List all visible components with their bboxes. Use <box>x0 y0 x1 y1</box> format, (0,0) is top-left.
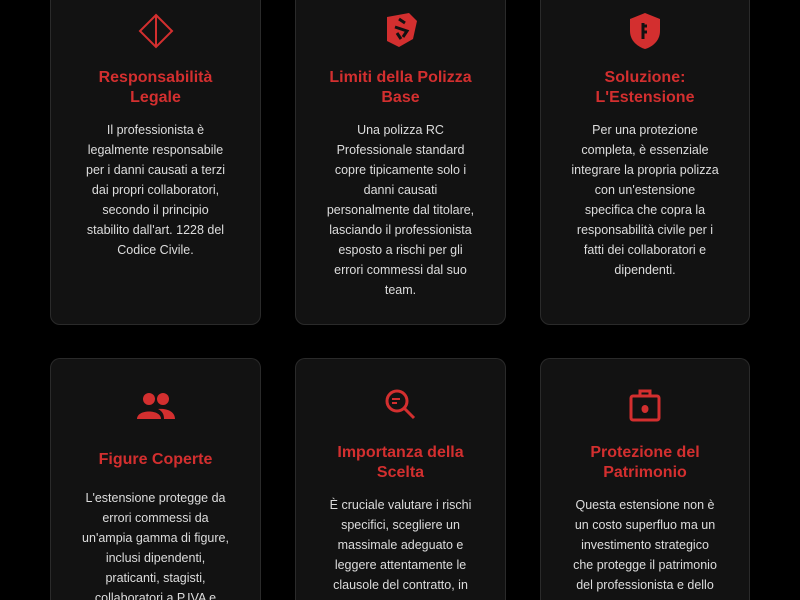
body: errori commessi dal suo <box>334 263 467 277</box>
body <box>327 123 474 297</box>
title <box>99 69 212 106</box>
icon: people <box>137 393 175 419</box>
body: del professionista e dello <box>576 578 714 592</box>
body: danni causati <box>364 183 437 197</box>
body: stabilito dall'art. 1228 del <box>87 223 224 237</box>
title: Figure Coperte <box>99 451 212 468</box>
body: esposto a rischi per gli <box>338 243 463 257</box>
title: Patrimonio <box>603 464 687 481</box>
body: legalmente responsabile <box>88 143 223 157</box>
body: investimento strategico <box>581 538 709 552</box>
body: Per una protezione <box>592 123 698 137</box>
icon: briefcase lock <box>630 390 660 422</box>
title: Soluzione: <box>605 69 685 86</box>
title <box>337 444 464 481</box>
body: specifici, scegliere un <box>341 518 460 532</box>
body: lasciando il professionista <box>329 223 472 237</box>
body: clausole del contratto, in <box>333 578 468 592</box>
body: specifica che copra la <box>585 203 705 217</box>
card: Importanza della Scelta <box>295 358 506 600</box>
title <box>596 69 694 106</box>
body: praticanti, stagisti, <box>105 571 206 585</box>
body <box>330 498 471 592</box>
body: integrare la propria polizza <box>571 163 719 177</box>
card: Protezione del Patrimonio <box>540 358 750 600</box>
body: Il professionista è <box>107 123 204 137</box>
body: dai propri collaboratori, <box>92 183 219 197</box>
title: Base <box>381 89 420 106</box>
body <box>82 491 229 600</box>
title: Scelta <box>377 464 424 481</box>
icon: diamond <box>138 14 174 48</box>
body: È cruciale valutare i rischi <box>330 498 471 512</box>
body: secondo il principio <box>102 203 209 217</box>
body: massimale adeguato e <box>338 538 463 552</box>
body: copre tipicamente solo i <box>335 163 466 177</box>
title: Protezione del <box>590 444 700 461</box>
title: Limiti della Polizza <box>329 69 472 86</box>
body <box>86 123 225 257</box>
body: responsabilità civile per i <box>577 223 713 237</box>
icon: magnifier <box>386 390 415 419</box>
body: con un'estensione <box>595 183 695 197</box>
card: Figure Coperte <box>50 358 261 600</box>
title: Importanza della <box>337 444 464 461</box>
body: un costo superfluo ma un <box>575 518 715 532</box>
title: Legale <box>130 89 181 106</box>
body: fatti dei collaboratori e <box>584 243 706 257</box>
body: leggere attentamente le <box>335 558 466 572</box>
icon: shield key <box>630 13 660 49</box>
title <box>590 444 700 481</box>
card: Responsabilità Legale <box>50 0 261 325</box>
body: Una polizza RC <box>357 123 444 137</box>
body: completa, è essenziale <box>581 143 709 157</box>
body: un'ampia gamma di figure, <box>82 531 229 545</box>
body: team. <box>385 283 416 297</box>
body <box>573 498 717 592</box>
body: che protegge il patrimonio <box>573 558 717 572</box>
title <box>329 69 472 106</box>
card: Limiti della Polizza Base <box>295 0 506 325</box>
body: inclusi dipendenti, <box>106 551 205 565</box>
body: dipendenti. <box>614 263 676 277</box>
body: errori commessi da <box>102 511 209 525</box>
body <box>571 123 719 277</box>
body: L'estensione protegge da <box>86 491 226 505</box>
title: L'Estensione <box>596 89 694 106</box>
body: personalmente dal titolare, <box>327 203 474 217</box>
body: per i danni causati a terzi <box>86 163 225 177</box>
body: Professionale standard <box>337 143 464 157</box>
icon: shield broken <box>387 13 417 47</box>
body: Codice Civile. <box>117 243 194 257</box>
body: Questa estensione non è <box>576 498 714 512</box>
card: Soluzione <box>540 0 750 325</box>
title: Responsabilità <box>99 69 212 86</box>
